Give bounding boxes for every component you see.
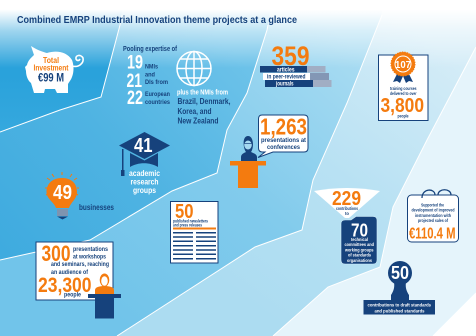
text: plus the NMIs: plus the NMIs from — [177, 90, 228, 96]
number: 22: 22 — [127, 88, 143, 109]
icon: graduation cap — [119, 132, 170, 176]
text: and published standards: and published standards — [374, 308, 425, 314]
panel: workshop presentations — [36, 241, 121, 318]
number: 3,800: 3,800 — [380, 95, 424, 117]
text: pooling heading: Pooling expertise of — [123, 46, 178, 53]
text: to: to — [345, 211, 349, 216]
icon: speaker at lectern — [88, 274, 121, 318]
orange rule — [173, 228, 216, 230]
panel: instrumentation sales — [408, 190, 458, 242]
text: and press releases: and press releases — [173, 222, 203, 228]
icon: rosette — [391, 52, 415, 76]
businesses — [45, 172, 114, 220]
piggy bank: total investment — [25, 46, 83, 93]
text: technical: technical — [351, 237, 368, 242]
text: people: people — [64, 292, 81, 298]
conference presentations — [230, 114, 308, 188]
text: articles: articles — [277, 66, 295, 74]
text: an audience of: an audience of — [51, 269, 89, 276]
icon: light bulb — [45, 172, 79, 220]
text: countries: countries — [145, 99, 170, 106]
icon: piggy bank — [25, 46, 74, 93]
text: conferences: conferences — [267, 144, 300, 151]
text: in peer-reviewed: in peer-reviewed — [267, 74, 306, 80]
panel background — [36, 242, 113, 300]
text: New Zealand: New Zealand — [178, 116, 218, 126]
text: contributions: contributions — [336, 206, 358, 211]
title: Combined EMRP Industrial Innovation theme projects at a glance — [17, 14, 297, 26]
text: academic: academic — [129, 168, 160, 178]
standards contributions funnel — [314, 188, 380, 218]
speech bubble — [258, 115, 308, 158]
text: projected sales of: projected sales of — [418, 218, 448, 223]
text: presentations at: presentations at — [261, 137, 307, 144]
number: 107: 107 — [395, 59, 411, 71]
text: of standards: of standards — [348, 252, 371, 258]
text: partner NMIs — [177, 90, 230, 126]
number: 50: 50 — [175, 201, 194, 223]
text: journals: journals — [275, 80, 294, 88]
number: 50: 50 — [391, 263, 409, 283]
number: 300: 300 — [42, 241, 70, 266]
number: 70: 70 — [351, 220, 368, 240]
number: 110.4 million euro: €110.4 M — [409, 226, 456, 242]
icon: stamp — [364, 261, 435, 314]
number: 41: 41 — [134, 135, 152, 157]
text: delivered to over: delivered to over — [390, 91, 417, 96]
panel background — [170, 202, 218, 263]
text: Korea, and: Korea, and — [178, 106, 212, 116]
pooling expertise block — [123, 46, 178, 109]
academic research groups — [119, 132, 170, 195]
text: committees and: committees and — [344, 242, 374, 247]
text: European: European — [145, 91, 170, 98]
text: contributions to draft standards: contributions to draft standards — [368, 302, 431, 308]
text: DIs from: DIs from — [145, 79, 168, 86]
text: Brazil, Denmark: Brazil, Denmark, — [178, 96, 230, 106]
number: 1,263: 1,263 — [260, 114, 307, 140]
folder shape — [341, 216, 377, 264]
text: organisations: organisations — [347, 258, 372, 263]
draft standards stamp — [364, 261, 435, 314]
text: total label: Total — [43, 56, 59, 65]
icon: orange lectern — [230, 161, 266, 188]
text: investment label: Investment — [34, 64, 69, 72]
number: 229: 229 — [332, 188, 361, 210]
text column lines — [173, 233, 216, 259]
number: 49: 49 — [53, 182, 72, 204]
text: people: people — [398, 114, 409, 118]
technical committees folder — [341, 216, 377, 264]
text: and seminars: and seminars, reaching — [51, 261, 109, 268]
panel background — [378, 55, 428, 120]
icon: funnel — [314, 188, 380, 218]
text: instrumentation with: instrumentation with — [415, 213, 451, 218]
icon: calendar rings — [422, 190, 451, 198]
text: NMIs: NMIs — [145, 64, 158, 70]
journal articles — [260, 41, 332, 88]
text: supported the: Supported the — [421, 202, 444, 208]
text: groups: groups — [133, 185, 156, 195]
text: research: research — [130, 176, 158, 186]
icon: ribbon tails — [393, 72, 413, 83]
text: working groups: working groups — [344, 248, 374, 252]
panel: training courses — [378, 52, 428, 120]
text: at workshops: at workshops — [73, 254, 106, 260]
text: businesses: businesses — [79, 202, 114, 212]
text: presentations: presentations — [73, 246, 108, 253]
number: 359: 359 — [272, 41, 310, 71]
text: investment amount: €99 M — [38, 72, 64, 84]
text: development of improved: development of improved — [412, 208, 455, 212]
number: 23,300: 23,300 — [38, 274, 92, 297]
text: and: and — [145, 72, 155, 78]
text: published newsletters: published newsletters — [173, 218, 209, 224]
icon: globe — [177, 52, 211, 86]
number: 19: 19 — [127, 52, 143, 74]
text: training courses: training courses — [390, 86, 417, 91]
number: 21: 21 — [126, 71, 142, 92]
icon: stacked books — [260, 66, 332, 87]
panel: newsletters — [170, 201, 218, 263]
icon: presenter — [241, 136, 257, 161]
calendar card — [408, 195, 458, 242]
icon: pig tail — [72, 55, 83, 66]
